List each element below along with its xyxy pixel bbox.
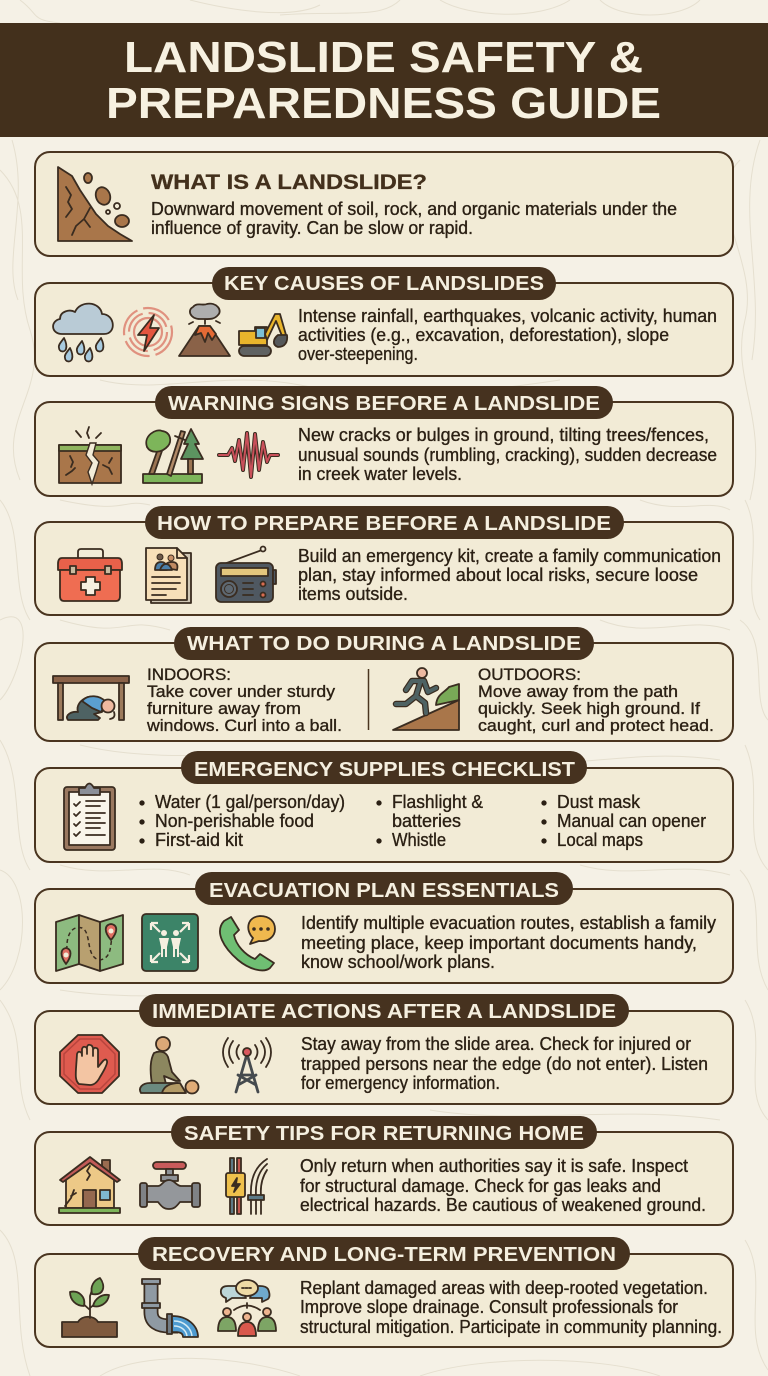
- icon: stop hand: [60, 1035, 119, 1093]
- icon: runner on slope: [393, 668, 459, 730]
- text: causes: Intense rainfall, earthquakes, volcanic activity, human: [298, 306, 717, 326]
- text: outdoors: [478, 665, 714, 735]
- text: warning signs: [298, 425, 717, 484]
- title banner: PREPAREDNESS GUIDE: [106, 79, 661, 128]
- text: supplies column two: Flashlight &: [392, 792, 483, 812]
- icon: rain cloud: [53, 304, 113, 361]
- text: immediate actions: for emergency information.: [301, 1073, 500, 1093]
- icon: earthquake bolt: [124, 308, 172, 356]
- heading: recovery: [138, 1237, 630, 1270]
- icon: damaged house: [59, 1157, 120, 1213]
- icon: excavator: [239, 314, 287, 356]
- text: evacuation: know school/work plans.: [301, 952, 495, 972]
- panel: how to prepare: [35, 506, 733, 615]
- heading: how to prepare: [145, 506, 624, 539]
- text: causes: [298, 306, 717, 364]
- text: indoors: INDOORS:: [147, 665, 231, 684]
- title banner: LANDSLIDE SAFETY &: [124, 33, 643, 82]
- text: supplies column one: Water (1 gal/person/day): [155, 792, 345, 812]
- text: recovery: [300, 1278, 722, 1337]
- text: supplies column one: Non-perishable food: [155, 811, 314, 831]
- text: immediate actions: Stay away from the slide area. Check for injured or: [301, 1034, 691, 1054]
- panel: what is a landslide: [35, 152, 733, 256]
- panel: emergency supplies: [35, 751, 733, 862]
- heading: key causes: KEY CAUSES OF LANDSLIDES: [224, 273, 544, 295]
- text: outdoors: OUTDOORS:: [478, 665, 581, 684]
- text: returning home: [300, 1156, 706, 1215]
- text: returning home: Only return when authorities say it is safe. Inspect: [300, 1156, 688, 1176]
- text: indoors: [146, 665, 342, 735]
- text: indoors: furniture away from: [147, 699, 301, 718]
- text: how to prepare: items outside.: [298, 584, 408, 604]
- icon: drainage pipe: [142, 1279, 198, 1337]
- text: immediate actions: trapped persons near the edge (do not enter). Listen: [301, 1054, 708, 1074]
- icon: volcano: [179, 304, 230, 356]
- heading: evacuation plan: EVACUATION PLAN ESSENTIALS: [209, 880, 559, 902]
- heading: what is a landslide: WHAT IS A LANDSLIDE?: [151, 171, 427, 194]
- text: warning signs: New cracks or bulges in ground, tilting trees/fences,: [298, 425, 709, 445]
- text: how to prepare: Build an emergency kit, create a family communication: [298, 546, 721, 566]
- panel: what to do during: [35, 627, 733, 741]
- heading: warning signs: [155, 386, 613, 419]
- text: supplies column three: Dust mask: [557, 792, 641, 812]
- icon: map with route: [56, 915, 123, 971]
- panel: immediate actions: [35, 994, 733, 1104]
- icon: seedling: [62, 1278, 117, 1337]
- text: returning home: for structural damage. Check for gas leaks and: [300, 1176, 661, 1196]
- text: supplies column one: First-aid kit: [155, 830, 243, 850]
- text: supplies column two: batteries: [392, 811, 461, 831]
- text: evacuation: meeting place, keep important documents handy,: [301, 933, 697, 953]
- icon: community planning: [218, 1280, 276, 1336]
- heading: during a landslide: WHAT TO DO DURING A LANDSLIDE: [187, 633, 581, 655]
- panel: evacuation plan: [35, 872, 733, 983]
- text: evacuation: [301, 913, 716, 972]
- text: supplies column three: Manual can opener: [557, 811, 706, 831]
- icon: radio: [216, 546, 276, 602]
- icon: family plan document: [146, 548, 191, 603]
- text: how to prepare: plan, stay informed about local risks, secure loose: [298, 565, 698, 585]
- icon: ground cracks: [59, 427, 121, 484]
- icon: electrical wires: [226, 1158, 267, 1214]
- text: indoors: Take cover under sturdy: [147, 682, 336, 701]
- panel: returning home: [35, 1116, 733, 1225]
- text: immediate actions: [301, 1034, 708, 1093]
- text: indoors: windows. Curl into a ball.: [146, 716, 342, 735]
- panel: recovery: [35, 1237, 733, 1347]
- text: definition: Downward movement of soil, rock, and organic materials under the: [151, 199, 677, 219]
- icon: clipboard checklist: [64, 784, 115, 850]
- heading: how to prepare: HOW TO PREPARE BEFORE A LANDSLIDE: [157, 513, 611, 535]
- heading: emergency supplies: [181, 751, 587, 784]
- panel: warning signs: [35, 386, 733, 496]
- text: causes: over-steepening.: [298, 344, 418, 364]
- text: outdoors: Move away from the path: [478, 682, 678, 701]
- text: warning signs: in creek water levels.: [298, 464, 462, 484]
- icon: phone and speech bubble: [220, 916, 275, 970]
- heading: returning home: [171, 1116, 597, 1149]
- text: supplies column two: Whistle: [392, 830, 446, 850]
- icon: sound wave: [219, 433, 278, 477]
- icon: first aid to injured person: [140, 1037, 198, 1094]
- text: supplies column two: [376, 792, 483, 850]
- text: definition: influence of gravity. Can be slow or rapid.: [151, 218, 473, 238]
- text: outdoors: caught, curl and protect head.: [478, 716, 714, 735]
- icon: assembly point: [142, 914, 198, 971]
- text: definition: [151, 199, 677, 238]
- text: supplies column three: [542, 792, 706, 850]
- text: causes: activities (e.g., excavation, deforestation), slope: [298, 325, 669, 345]
- text: outdoors: quickly. Seek high ground. If: [478, 699, 700, 718]
- text: evacuation: Identify multiple evacuation routes, establish a family: [301, 913, 716, 933]
- panel: key causes: [35, 267, 733, 376]
- heading: key causes: [212, 267, 556, 300]
- icon: emergency kit: [58, 549, 122, 601]
- text: recovery: Improve slope drainage. Consult professionals for: [300, 1297, 678, 1317]
- heading: warning signs: WARNING SIGNS BEFORE A LANDSLIDE: [168, 393, 600, 415]
- heading: recovery: RECOVERY AND LONG-TERM PREVENTION: [152, 1244, 616, 1266]
- heading: immediate actions: [139, 994, 629, 1027]
- text: warning signs: unusual sounds (rumbling, cracking), sudden decrease: [298, 445, 717, 465]
- icon: landslide slope: [58, 167, 132, 241]
- heading: evacuation plan: [195, 872, 573, 905]
- icon: person under table: [53, 676, 129, 720]
- text: recovery: Replant damaged areas with deep-rooted vegetation.: [300, 1278, 708, 1298]
- text: how to prepare: [298, 546, 721, 604]
- icon: tilting trees: [143, 429, 203, 483]
- heading: returning home: SAFETY TIPS FOR RETURNING HOME: [184, 1123, 584, 1145]
- heading: emergency supplies: EMERGENCY SUPPLIES CHECKLIST: [194, 759, 575, 781]
- text: supplies column one: [140, 792, 345, 850]
- text: recovery: structural mitigation. Participate in community planning.: [300, 1317, 722, 1337]
- icon: signal tower: [223, 1038, 271, 1092]
- text: returning home: electrical hazards. Be cautious of weakened ground.: [300, 1195, 706, 1215]
- icon: gas valve: [140, 1162, 200, 1209]
- heading: immediate actions: IMMEDIATE ACTIONS AFTER A LANDSLIDE: [152, 1001, 616, 1023]
- heading: during a landslide: [174, 627, 594, 660]
- text: supplies column three: Local maps: [557, 830, 643, 850]
- title banner: [0, 23, 768, 137]
